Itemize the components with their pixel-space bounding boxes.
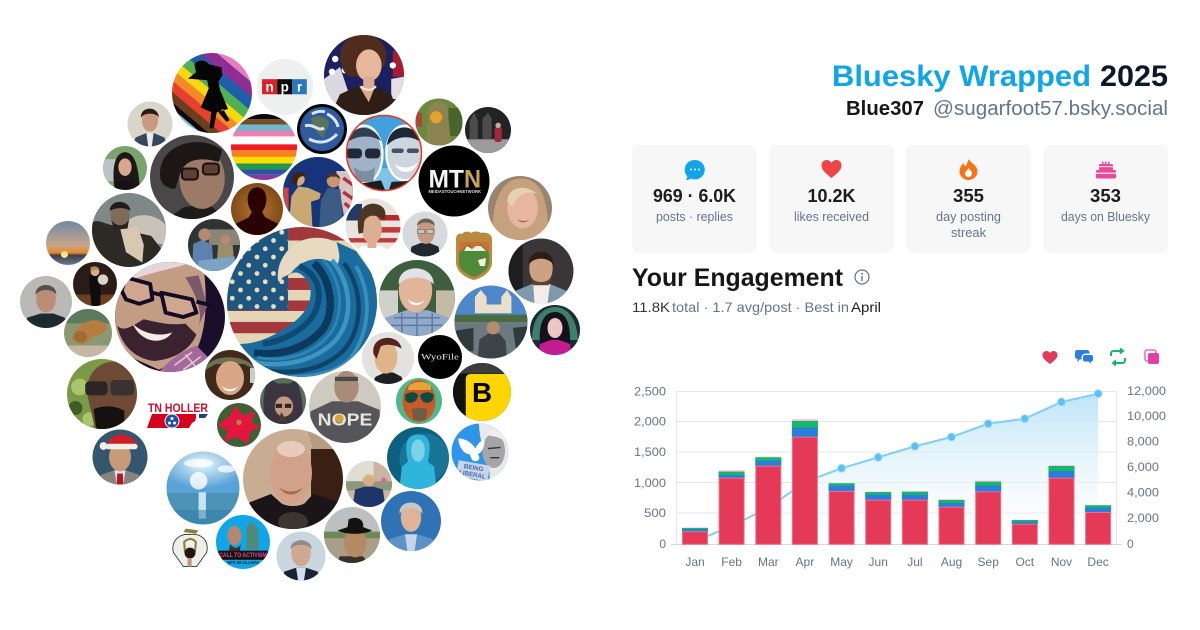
stacked bars [682,419,1111,544]
avatar: white dog illustration [169,527,211,569]
left axis labels: 2,500 [634,384,666,398]
right axis labels: 6,000 [1127,460,1159,474]
icon: legend replies [1075,350,1093,364]
left axis labels: 2,000 [634,414,666,428]
avatar: man in blue [381,491,441,551]
avatar: curly-haired man with glasses [150,135,234,219]
right axis labels: 12,000 [1127,384,1166,398]
icon: info [855,270,869,284]
avatar: Call to Activism: WITH JIM CALLAHAN [227,560,259,565]
left axis labels [634,384,666,551]
engagement summary [632,299,881,315]
engagement summary: 11.8K [632,299,671,315]
avatar: woman in cat hat [260,378,306,424]
title: 2025 [1100,60,1168,93]
avatar: Harris handshake [283,157,353,227]
avatar: WyoFile logo [418,335,462,379]
right axis labels: 10,000 [1127,409,1166,423]
left axis labels: 1,000 [634,476,666,490]
avatar: npr logo: r [297,79,303,94]
icon: legend heart [1042,351,1058,364]
panel: day posting streak: 355 [953,186,984,206]
avatar: 3D cartoon man [362,332,414,384]
avatar: big wave on flag [227,227,377,377]
avatar: purple-haired girl [530,305,580,355]
month labels: Jan [685,555,705,569]
icon: heart [822,160,842,178]
avatar: man with eyeglasses in parka [402,212,448,256]
cumulative area [695,394,1098,544]
panel: days on Bluesky: 353 [1090,186,1121,206]
avatar: blue hoodie figure [387,427,449,489]
icon: flame [960,159,978,180]
avatar: earth [297,104,347,154]
avatar: man in hat outdoors [324,507,380,563]
panel: posts and replies: 969 · 6.0K [653,186,736,206]
chart legend icons [1042,348,1159,366]
avatar: Call to Activism [216,515,270,569]
avatar: grey-haired man [20,276,72,328]
left axis labels: 0 [659,537,666,551]
panel: days on Bluesky [1043,145,1168,253]
avatar: poinsettia [217,403,261,447]
avatar: sky and ocean [166,452,240,524]
month labels: Mar [758,555,779,569]
avatar: two men sitting [188,219,240,271]
panel: likes received: 10.2K [808,186,856,206]
avatar: dog on rug [64,309,112,357]
avatar: yellow B logo [453,363,511,421]
avatar: woman and dog [73,262,117,306]
right axis labels: 4,000 [1127,486,1159,500]
avatar: MTN logo: MT [428,166,464,193]
avatar: woman with flag [324,34,404,115]
quotes layer [682,419,1111,532]
panel: day posting streak [906,145,1031,253]
month labels: Feb [721,555,742,569]
avatar: MTN logo: MEIDASTOUCHNETWORK [428,189,482,194]
avatar: Being Liberal butterfly [452,424,508,481]
sign: Being Liberal: LIBERAL [458,469,486,481]
month labels: Jun [869,555,888,569]
avatar: npr logo: n [265,79,274,94]
avatar: silhouette on brown [231,183,283,235]
avatar: MTN logo: N [464,166,481,193]
replies layer [682,428,1111,532]
panel: day posting streak: day posting [936,210,1001,224]
engagement summary: April [851,299,881,315]
sign: Being Liberal: BEING [463,463,484,473]
avatar: MTN logo [418,146,490,216]
left axis labels: 1,500 [634,445,666,459]
avatar: woman in blue dress [346,461,392,507]
reposts layer [682,421,1111,531]
avatar: blonde woman [488,176,552,240]
icon: cake [1096,162,1116,178]
month labels: Nov [1051,555,1072,569]
icon: chat bubble [685,160,705,180]
avatar: WyoFile logo: WyoFile [421,352,459,362]
avatar: gray forest red figure [465,107,511,153]
month labels: May [830,555,853,569]
avatar: woman in knit hat [205,350,255,400]
avatar: man in santa hat [92,430,148,484]
engagement chart [634,384,1166,569]
avatar: man in suit [128,102,172,146]
engagement summary: total · 1.7 avg/post · Best in [672,299,849,315]
avatar: pride flag [231,114,297,180]
avatar: man with big glasses [115,262,225,372]
logo: TN Holler [147,401,208,428]
icon: legend quotes [1145,350,1159,364]
avatar: painted mask man [396,378,442,424]
panel: likes received [769,145,894,253]
avatar: yellow B logo: B [472,377,492,408]
avatar: smiling older man [276,532,326,580]
avatar: npr logo [257,59,313,115]
sign: Being Liberal [456,460,490,481]
avatar: two men with red ring [346,115,423,191]
month labels: Jul [907,555,923,569]
panel: posts and replies: posts · replies [656,210,733,224]
avatar: npr logo: p [281,79,289,94]
month labels: Aug [941,555,962,569]
panel: likes received: likes received [794,210,869,224]
avatar: green costume [416,98,462,146]
title: Bluesky Wrapped [832,60,1091,93]
avatar: Call to Activism: CALL TO ACTIVISM [219,552,267,559]
avatar cloud [20,14,580,580]
likes layer [682,437,1111,544]
avatar: man with sunglasses and foliage [67,359,137,429]
icon: legend repost [1111,348,1125,366]
logo: TN Holler: TN HOLLER [148,401,208,415]
avatar: sunset [46,221,90,265]
panel: posts and replies [632,145,757,253]
avatar: man with flag backdrop [346,198,400,254]
right axis labels [1127,384,1166,551]
month labels: Apr [796,555,814,569]
avatar: badge shield [456,232,492,280]
avatar: man against dark wall [508,238,574,304]
panel: days on Bluesky: days on Bluesky [1061,210,1151,224]
avatar: church and man [454,286,528,358]
panel: day posting streak: streak [951,226,987,240]
avatar: woman with dark hair [103,146,147,190]
right axis labels: 8,000 [1127,434,1159,448]
user handle: Blue307 [846,98,924,120]
avatar: man in NOPE shirt: NOPE [318,410,372,430]
month labels: Oct [1015,555,1035,569]
avatar: rainbow silhouette girl [172,53,252,133]
month labels: Sep [978,555,999,569]
cumulative line [695,390,1102,542]
user handle: @sugarfoot57.bsky.social [933,98,1168,120]
month labels: Dec [1087,555,1109,569]
avatar: bald man in video call [243,429,343,532]
month labels [685,555,1109,569]
right axis labels: 2,000 [1127,511,1159,525]
avatar: man in NOPE shirt [309,371,381,443]
heading: Your Engagement: Your Engagement [632,264,844,292]
avatar: smiling older man in plaid [379,260,455,336]
left axis labels: 500 [644,506,666,520]
right axis labels: 0 [1127,537,1134,551]
avatar: man in coat [92,193,166,267]
